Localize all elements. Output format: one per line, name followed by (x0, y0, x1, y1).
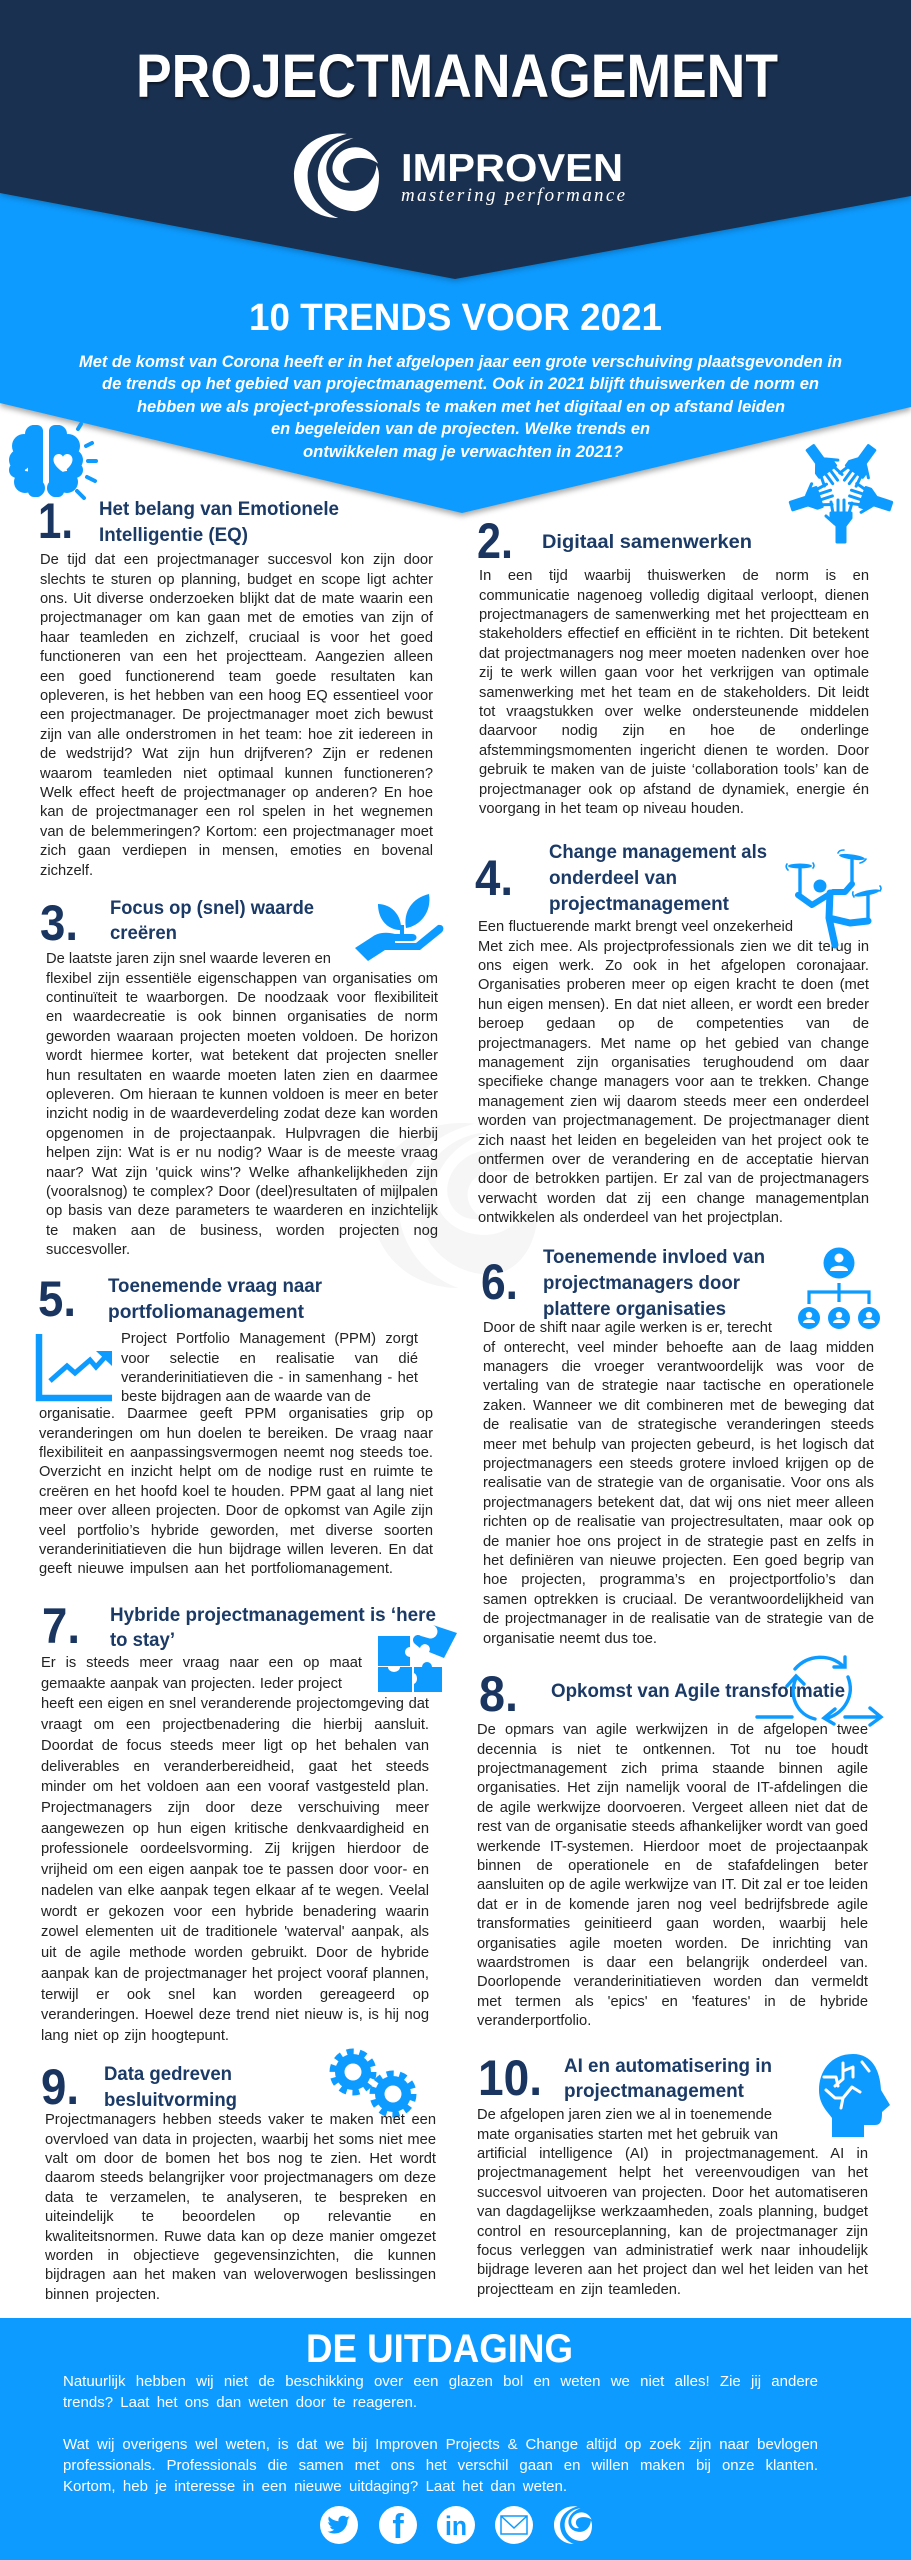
text: trend 1: de wedstrijd? Wat zijn hun drijfveren? Zijn er redenen (40, 746, 433, 762)
number 10: 10. (478, 2050, 542, 2106)
subtitle: 10 TRENDS VOOR 2021 (249, 297, 662, 339)
text: trend 6: meer met behulp van projecten gebeurd, is het logisch dat (483, 1437, 874, 1453)
blue intro banner (0, 150, 911, 513)
icon: improven logo (554, 2506, 592, 2544)
icon: AI head (819, 2054, 890, 2137)
text: trend 7 (41, 1655, 429, 2044)
text: trend 7: zowel elementen uit de traditionele 'waterval' aanpak, als (41, 1924, 429, 1940)
icon: brain with heart (9, 424, 96, 498)
text: trend 3: succesvoller. (46, 1242, 130, 1258)
text: trend 8: projectmanagement zich prima staande binnen agile (477, 1761, 868, 1777)
text: trend 3: opleveren. Om hieraan te kunnen voldoen is meer en beter (46, 1087, 438, 1103)
text: trend 1: zich gaan verdiepen in mensen, emoties en bovenal (40, 843, 433, 859)
icon: juggling figure (786, 850, 881, 945)
heading 5 (108, 1275, 322, 1323)
text: trend 6: Door de shift naar agile werken is er, terecht (483, 1320, 772, 1336)
text: trend 4: door de betrokken partijen. Er zal van de projectmanagers (478, 1171, 869, 1187)
text: trend 9: bijdragen aan het maken van weloverwogen beslissingen (45, 2267, 436, 2283)
panel: footer De Uitdaging (0, 2318, 911, 2560)
subtitle and intro (79, 297, 842, 461)
text: trend 3: helpen zijn: Wat is er nu nodig? Waar is de meeste vraag (46, 1145, 438, 1161)
heading 10 (564, 2055, 772, 2102)
text: trend 5 intro: veranderinitiatieven die - in samenhang - het (121, 1370, 418, 1386)
icon: plant in hand (355, 894, 443, 961)
heading 9: besluitvorming (104, 2089, 237, 2111)
text: trend 5: Overzicht en inzicht helpt om de nodige rust en ruimte te (39, 1464, 433, 1480)
heading 7 (110, 1604, 436, 1651)
text: trend 6: projectmanagers betekent dat, dat wij ons niet meer alleen (483, 1495, 874, 1511)
text: trend 9: overvloed van data in projecten, waarbij het soms niet mee (45, 2132, 436, 2148)
footer text: professionals. Professionals die samen met ons het verschil gaan en willen maken bij onze klanten. (63, 2456, 818, 2474)
text: trend 6: vertaling van de strategie naar tactische en operationele (483, 1378, 874, 1394)
intro text: Met de komst van Corona heeft er in het afgelopen jaar een grote verschuiving plaatsgevonden in (79, 353, 842, 371)
text: trend 1: projectmanager om kan gaan met de emoties van zijn of (40, 610, 433, 626)
logo wordmark: IMPROVEN (401, 147, 623, 190)
heading 7: Hybride projectmanagement is ‘here (110, 1604, 436, 1626)
text: trend 2: communicatie nagenoeg volledig digitaal verloopt, dienen (479, 588, 869, 604)
icon: facebook (379, 2506, 417, 2546)
icon: linkedin (437, 2506, 475, 2544)
text: trend 1: slechts te sturen op planning, budget en scope ligt achter (40, 572, 433, 588)
text: trend 3: en waardecreatie is ook binnen organisaties de norm (46, 1009, 438, 1025)
text: trend 5: veranderingen om hun doelen te bereiken. De vraag naar (39, 1426, 433, 1442)
text: trend 4: ontwikkelen als onderdeel van het projectplan. (478, 1210, 783, 1226)
logo tagline: mastering performance (401, 185, 625, 206)
panel: trend 4 (475, 841, 882, 1226)
text: trend 7: Doordat de focus steeds meer ligt op het behalen van (41, 1738, 429, 1754)
watermark logo (372, 1123, 538, 1288)
heading 9: Data gedreven (104, 2063, 232, 2085)
text: trend 6 (483, 1320, 874, 1647)
text: trend 7: deliverables en veranderbereidheid, gaat het steeds (41, 1759, 429, 1775)
heading 3: creëren (110, 922, 177, 944)
text: trend 6: de manier hoe ons project in de strategie past en zelfs in (483, 1534, 874, 1550)
text: trend 2: dat projectmanagers nog meer moeten nadenken over hoe (479, 646, 869, 662)
text: trend 8: werkende IT-systemen. Hierdoor moet de projectaanpak (477, 1839, 868, 1855)
text: trend 7: aanpak kan de projectmanager het project vooraf plannen, (41, 1966, 429, 1982)
text: trend 6: organisatie neemt dus toe. (483, 1631, 657, 1647)
text: trend 7: vraagt om een projectbenadering die hierbij aansluit. (41, 1717, 429, 1733)
heading 10: projectmanagement (564, 2080, 744, 2102)
intro text: ontwikkelen mag je verwachten in 2021? (303, 443, 623, 461)
text: trend 7: gemaakte aanpak van projecten. Ieder project (41, 1676, 342, 1692)
text: trend 4: Organisaties proberen meer op eigen kracht te doen (met (478, 977, 869, 993)
header background (0, 0, 911, 519)
text: trend 1: Welk effect heeft de projectmanager op anderen? En hoe (40, 785, 433, 801)
heading 4 (549, 841, 767, 915)
icon: gears (332, 2052, 414, 2114)
heading 6: plattere organisaties (543, 1298, 726, 1320)
text: trend 1: zichzelf. (40, 863, 93, 879)
text: trend 10: projectteam en zijn teamleden. (477, 2282, 681, 2298)
footer heading: DE UITDAGING (306, 2327, 573, 2371)
number 3: 3. (40, 895, 78, 951)
text: trend 1: zijn van alle onderstromen in het team: hoe zit iedereen in (40, 727, 433, 743)
text: trend 3: te maken aan de business, worden projecten nog (46, 1223, 438, 1239)
panel: trend 7 (41, 1598, 457, 2044)
text: trend 2: projectmanagers de samenwerking met het projectteam en (479, 607, 869, 623)
text: trend 4: hun eigen mensen). En dat niet alleen, er wordt een breder (478, 997, 869, 1013)
number 8: 8. (479, 1666, 518, 1722)
panel: trend 10 (477, 2050, 890, 2298)
text: trend 2: daarvoor nodig zijn en hoe de onderlinge (479, 723, 869, 739)
text: trend 7: uit de agile methode worden gebruikt. Door de hybride (41, 1945, 429, 1961)
footer text: Kortom, heb je interesse in een nieuwe uitdaging? Laat het dan weten. (63, 2478, 567, 2494)
text: trend 7: veranderingen. Hoewel deze trend niet nieuw is, is hij nog (41, 2007, 429, 2023)
icon: agile cycle (757, 1657, 881, 1725)
text: trend 7: aangewezen op hun eigen kritische denkvaardigheid en (41, 1821, 429, 1837)
text: trend 6: managers die vroeger verantwoordelijk was voor de (483, 1359, 874, 1375)
text: trend 3: inzicht nodig in de waardeverdeling zodat deze kan worden (46, 1106, 438, 1122)
text: trend 9: binnen projecten. (45, 2287, 160, 2303)
text: trend 10: De afgelopen jaren zien we al in toenemende (477, 2107, 772, 2123)
text: trend 4: verwacht worden dat zij een change managementplan (478, 1191, 869, 1207)
text: trend 2: gebruik te maken van de juiste ‘collaboration tools’ kan de (479, 762, 869, 778)
number 7: 7. (42, 1598, 80, 1654)
text: trend 6: realisatie van de strategie van de organisatie. Voor ons als (483, 1475, 874, 1491)
text: trend 7: Er is steeds meer vraag naar een op maat (41, 1655, 362, 1671)
heading 1: Intelligentie (EQ) (99, 524, 248, 546)
text: trend 9: Projectmanagers hebben steeds vaker te maken met een (45, 2112, 436, 2128)
heading 2: Digitaal samenwerken (542, 531, 752, 553)
text: trend 4: beroep gedaan op de competenties van de (478, 1016, 869, 1032)
heading 10: AI en automatisering in (564, 2055, 772, 2077)
panel: trend 5 (36, 1271, 433, 1577)
text: trend 3 (46, 951, 438, 1258)
heading 5: Toenemende vraag naar (108, 1275, 322, 1297)
icon: organisation chart (798, 1248, 880, 1329)
text: trend 2: tot vraagstukken over welke ondersteunende middelen (479, 704, 869, 720)
text: trend 10: artificial intelligence (AI) in projectmanagement. AI in (477, 2146, 868, 2162)
icon: mail (495, 2506, 533, 2544)
text: trend 5 intro: beste bijdragen aan de waarde van de (121, 1389, 371, 1405)
text: trend 3: flexibel zijn essentiële eigenschappen van organisaties om (46, 971, 438, 987)
heading 7: to stay’ (110, 1629, 175, 1651)
text: trend 9: daarom steeds belangrijker voor projectmanagers om deze (45, 2170, 436, 2186)
text: trend 8: transformaties geinitieerd gaan worden, waarbij hele (477, 1916, 868, 1932)
text: trend 5: veranderinitiatieven die hun bijdrage willen leveren. En dat (39, 1542, 433, 1558)
text: trend 9: kwaliteitsnormen. Ruwe data kan op deze manier omgezet (45, 2229, 436, 2245)
number 9: 9. (41, 2059, 79, 2115)
text: trend 6: hoe projecten, programma’s en projectportfolio’s dan (483, 1572, 874, 1588)
text: trend 10: focus verleggen van administratief werk naar inhoudelijk (477, 2243, 868, 2259)
text: trend 8: organisaties agile moeten worden. De inrichting van (477, 1936, 868, 1952)
text: trend 5: flexibiliteit en aanpassingsvermogen neemt nog steeds toe. (39, 1445, 433, 1461)
heading 3: Focus op (snel) waarde (110, 897, 314, 919)
text: trend 5 (39, 1406, 433, 1577)
text: trend 7: nadelen van elke aanpak tegen elkaar af te wegen. Veelal (41, 1883, 429, 1899)
text: trend 7: wordt er gekozen voor een hybride benadering waarin (41, 1904, 429, 1920)
text: trend 6: richten op de realisatie van projectresultaten, maar ook op (483, 1514, 874, 1530)
text: trend 5: meer over alleen projecten. Door de opkomst van Agile zijn (39, 1503, 433, 1519)
icon: logo swirl (294, 133, 379, 218)
text: trend 10 (477, 2107, 868, 2298)
text: trend 4: ontfermen over de verandering en de acceptatie hiervan (478, 1152, 869, 1168)
text: trend 3: (vooralsnog) te complex? Door (deel)resultaten of mijlpalen (46, 1184, 438, 1200)
text: trend 4: projectmanagers. Met name op het gebied van change (478, 1036, 869, 1052)
text: trend 8: organisaties. Het zijn namelijk vooral de IT-afdelingen die (477, 1780, 868, 1796)
text: trend 8: De opmars van agile werkwijzen in de afgelopen twee (477, 1722, 868, 1738)
text: trend 3: hun resultaten en waarde moeten laten zien en daarmee (46, 1068, 438, 1084)
text: trend 1: haar teamleden en zichzelf, cruciaal is voor het goed (40, 630, 433, 646)
icon: five hands (787, 439, 894, 542)
heading 6: Toenemende invloed van (543, 1246, 765, 1268)
text: trend 6: zaken. Wanneer we dit combineren met de beweging dat (483, 1398, 874, 1414)
text: trend 6: het definiëren van nieuwe projecten. Een goed begrip van (483, 1553, 874, 1569)
logo: Improven (294, 134, 625, 218)
text: trend 10: control en resourceplanning, kan de projectmanager zijn (477, 2224, 868, 2240)
text: trend 1: een projectmanager. De projectmanager moet zich bewust (40, 707, 433, 723)
heading 6: projectmanagers door (543, 1272, 740, 1294)
text: trend 1: waarom teamleden niet optimaal kunnen functioneren? (40, 766, 433, 782)
text: trend 10: van dagdagelijkse werkzaamheden, zoals planning, budget (477, 2204, 868, 2220)
text: trend 9: worden in objectieve gegevensinzichten, die kunnen (45, 2248, 436, 2264)
panel: trend 6 (481, 1246, 880, 1647)
heading 3 (110, 897, 314, 944)
heading 4: Change management als (549, 841, 767, 863)
text: trend 10: projectmanagement helpt het vereenvoudigen van het (477, 2165, 868, 2181)
text: trend 4 (478, 919, 869, 1226)
text: trend 5 intro: Project Portfolio Management (PPM) zorgt (121, 1331, 418, 1347)
text: trend 9: uiteindelijk te beoordelen op relevantie en (45, 2209, 436, 2225)
text: trend 2: In een tijd waarbij thuiswerken de norm is en (479, 568, 869, 584)
text: trend 2: projectmanager ook op afstand de dynamiek, energie én (479, 782, 869, 798)
text: trend 7: Projectmanagers zijn door deze verschuiving meer (41, 1800, 429, 1816)
text: trend 1: opleveren, is het hebben van een hoog EQ essentieel voor (40, 688, 433, 704)
text: trend 10: bijdrage leveren aan het project dan wel het leiden van het (477, 2262, 868, 2278)
heading 1 (99, 498, 339, 546)
number 1: 1. (38, 493, 73, 549)
footer text: Wat wij overigens wel weten, is dat we bij Improven Projects & Change altijd op zoek zijn naar bevlogen (63, 2436, 818, 2452)
text: trend 8: Doorlopende veranderinitiatieven worden dan vermeldt (477, 1974, 868, 1990)
text: trend 7: terwijl er ook snel kan worden gereageerd op (41, 1986, 429, 2002)
text: trend 4: Met zich mee. Als projectprofessionals zien we dit terug in (478, 939, 869, 955)
text: trend 8: waardstromen is daar een belangrijk onderdeel van. (477, 1955, 868, 1971)
intro text: hebben we als project-professionals te maken met het digitaal en op afstand leiden (137, 398, 785, 416)
text: trend 6: de projectmanager in de realisatie van de strategie van de (483, 1611, 874, 1627)
panel: trend 3 (40, 894, 444, 1258)
text: trend 8: binnen de operationele en de stafafdelingen beter (477, 1858, 868, 1874)
text: trend 1 (40, 552, 433, 879)
intro text: en begeleiden van de projecten. Welke trends en (271, 420, 650, 438)
text: trend 5: organisatie. Daarmee geeft PPM organisaties grip op (39, 1406, 433, 1422)
text: trend 1: De tijd dat een projectmanager succesvol kon zijn door (40, 552, 433, 568)
text: trend 7: lang niet op zijn hoogtepunt. (41, 2028, 229, 2044)
footer text: trends? Laat het ons dan weten door te reageren. (63, 2394, 417, 2410)
number 2: 2. (477, 513, 513, 569)
intro text: de trends op het gebied van projectmanagement. Ook in 2021 blijft thuiswerken de norm en (102, 375, 819, 393)
text: trend 8: rest van de organisatie steeds afhankelijker wordt van goed (477, 1819, 868, 1835)
text: trend 7: heeft een eigen en snel veranderende projectomgeving dat (41, 1696, 429, 1712)
text: trend 2: stakeholders effectief en efficiënt in te richten. Dit betekent (479, 626, 869, 642)
text: trend 4: management zijn organisaties terughoudend om daar (478, 1055, 869, 1071)
text: trend 1: van de belemmeringen? Kortom: een projectmanager moet (40, 824, 433, 840)
text: trend 4: Een fluctuerende markt brengt veel onzekerheid (478, 919, 793, 935)
text: trend 3: opgenomen in de projectaanpak. Hulpvragen die hierbij (46, 1126, 438, 1142)
icon: twitter (320, 2506, 358, 2544)
text: trend 4: zich naast het leiden en begeleiden van het project ook te (478, 1133, 869, 1149)
text: trend 2: zij te werk willen gaan voor het verkrijgen van optimale (479, 665, 869, 681)
text: trend 5: creëren en het hoofd koel te houden. PPM gaat al lang niet (39, 1484, 433, 1500)
text: trend 2: afstemmingsmomenten ingericht dienen te worden. Door (479, 743, 869, 759)
text: trend 10: succesvol uitvoeren van projecten. Door het automatiseren (477, 2185, 868, 2201)
text: trend 6: samen optrekken is cruciaal. De verantwoordelijkheid van (483, 1592, 874, 1608)
text: trend 4: ons eigen werk. Zo ook in het afgelopen coronajaar. (478, 958, 869, 974)
text: trend 9 (45, 2112, 436, 2303)
text: trend 8 (477, 1722, 868, 2029)
text: trend 3: geworden waaraan projecten moeten voldoen. De horizon (46, 1029, 438, 1045)
text: trend 1: ons. Uit diverse onderzoeken blijkt dat de mate waarin een (40, 591, 433, 607)
icon: linkedin: in (445, 2511, 467, 2541)
number 4: 4. (475, 850, 513, 906)
text: trend 3: op basis van deze parameters te waarderen en inzichtelijk (46, 1203, 438, 1219)
number 5: 5. (38, 1271, 76, 1327)
icon: facebook: f (392, 2508, 404, 2546)
text: trend 9: data te verzamelen, te analyseren, te bespreken en (45, 2190, 436, 2206)
text: trend 4: specifieke change managers voor aan te trekken. Change (478, 1074, 869, 1090)
heading 4: projectmanagement (549, 893, 729, 915)
text: trend 7: vrijheid om een eigen aanpak toe te passen door voor- en (41, 1862, 429, 1878)
text: trend 8: dat er in de komende jaren nog veel bedrijfsbrede agile (477, 1897, 868, 1913)
text: trend 5 intro (121, 1331, 418, 1405)
icon: rising chart (39, 1334, 112, 1398)
footer text (63, 2372, 818, 2494)
text: trend 1: functioneren van een het projectteam. Aangezien alleen (40, 649, 433, 665)
text: trend 8: de agile werkwijze doorvoeren. Vergeet alleen niet dat de (477, 1800, 868, 1816)
text: trend 3: wordt hiermee korter, wat betekent dat projecten sneller (46, 1048, 438, 1064)
text: trend 5: veel portfolio’s hybride geworden, met diverse soorten (39, 1523, 433, 1539)
text: trend 4: management zien wij daarom steeds meer een onderdeel (478, 1094, 869, 1110)
text: trend 7: minder om het voldoen aan een vooraf vastgesteld plan. (41, 1779, 429, 1795)
text: trend 10: mate organisaties starten met het gebruik van (477, 2127, 778, 2143)
panel: trend 8 (477, 1655, 884, 2029)
text: trend 6: de realisatie van de strategische veranderingen steeds (483, 1417, 874, 1433)
text: trend 3: naar? Wat zijn 'quick wins'? Welke afhankelijkheden zijn (46, 1165, 438, 1181)
number 6: 6. (481, 1254, 518, 1310)
text: trend 2 (479, 568, 869, 817)
panel: trend 9 (41, 2048, 436, 2303)
panel: trend 1 (9, 422, 433, 879)
text: trend 1: een goed functionerend team goede resultaten kan (40, 669, 433, 685)
text: trend 8: met termen als 'epics' en 'features' in de hybride (477, 1994, 868, 2010)
heading 4: onderdeel van (549, 867, 677, 889)
text: trend 8: veranderportfolio. (477, 2013, 591, 2029)
text: trend 6: of onterecht, veel minder behoefte aan de laag midden (483, 1340, 874, 1356)
dark header banner (0, 0, 911, 279)
text: trend 9: valt om door de bomen het bos nog te zien. Het wordt (45, 2151, 436, 2167)
text: trend 7: professionele oordeelsvorming. Zij krijgen hierdoor de (41, 1841, 429, 1857)
text: trend 3: De laatste jaren zijn snel waarde leveren en (46, 951, 331, 967)
text: trend 8: decennia is niet te ontkennen. Tot nu toe houdt (477, 1742, 868, 1758)
panel: trend 2 (477, 444, 894, 817)
heading 9 (104, 2063, 237, 2111)
text: trend 8: aansluiten op de agile werkwijze van IT. Dit zal er toe leiden (477, 1877, 868, 1893)
text: trend 5: geeft nieuwe impulsen aan het portfoliomanagement. (39, 1561, 393, 1577)
intro text (79, 353, 842, 461)
heading 8: Opkomst van Agile transformatie (551, 1680, 845, 1702)
text: trend 2: voorgang in het team op niveau houden. (479, 801, 744, 817)
text: trend 3: continuïteit te waarborgen. De noodzaak voor flexibiliteit (46, 990, 438, 1006)
text: trend 2: samenwerking met het team en de stakeholders. Dit leidt (479, 685, 869, 701)
heading 1: Het belang van Emotionele (99, 498, 339, 520)
text: trend 4: worden van projectmanagement. De projectmanager dient (478, 1113, 869, 1129)
footer text: Natuurlijk hebben wij niet de beschikking over een glazen bol en weten we niet alles! Zie jij andere (63, 2372, 818, 2390)
icon: puzzle pieces (378, 1625, 457, 1692)
heading 5: portfoliomanagement (108, 1301, 304, 1323)
text: trend 1: kan de projectmanager een rol spelen in het wegnemen (40, 804, 433, 820)
text: trend 6: projectmanagers een steeds grotere invloed krijgen op de (483, 1456, 874, 1472)
heading 6 (543, 1246, 765, 1320)
text: trend 5 intro: voor selectie en realisatie van dié (121, 1351, 418, 1367)
